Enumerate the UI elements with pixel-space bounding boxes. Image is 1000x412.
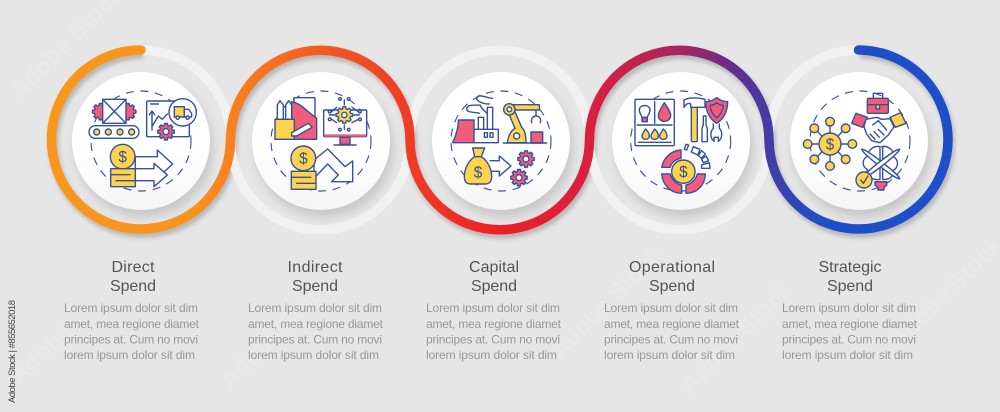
icon: operational spend: $ bbox=[679, 164, 688, 181]
title line 2: Spend bbox=[110, 278, 156, 295]
title: Operational bbox=[629, 259, 715, 276]
body text: lorem ipsum dolor sit dim bbox=[604, 348, 735, 362]
watermark text: Adobe bbox=[5, 317, 77, 389]
watermark text: Adobe Stock bbox=[675, 276, 798, 399]
body text: lorem ipsum dolor sit dim bbox=[64, 348, 195, 362]
ring shadow bbox=[54, 54, 950, 234]
icon: strategic spend: $ bbox=[826, 136, 835, 153]
body text: Lorem ipsum dolor sit dim bbox=[426, 301, 560, 315]
body text: principes at. Cum no movi bbox=[248, 332, 382, 346]
body text: amet, mea regione diamet bbox=[782, 317, 918, 331]
title: Indirect bbox=[288, 259, 343, 276]
white disc bbox=[790, 72, 928, 210]
title line 2: Spend bbox=[471, 278, 517, 295]
body text: principes at. Cum no movi bbox=[782, 332, 916, 346]
white disc bbox=[432, 72, 570, 210]
icon: capital spend: $ bbox=[474, 165, 483, 182]
icon: direct spend bbox=[89, 91, 196, 191]
body text: principes at. Cum no movi bbox=[64, 332, 198, 346]
white disc bbox=[72, 72, 210, 210]
body text: Lorem ipsum dolor sit dim bbox=[64, 301, 198, 315]
body text: amet, mea regione diamet bbox=[248, 317, 384, 331]
body text: amet, mea regione diamet bbox=[604, 317, 740, 331]
panel: direct spend bbox=[64, 72, 210, 362]
icon: direct spend: $ bbox=[118, 149, 127, 166]
white disc bbox=[612, 72, 750, 210]
title line 2: Spend bbox=[292, 278, 338, 295]
icon: capital spend bbox=[451, 91, 551, 191]
title line 2: Spend bbox=[649, 278, 695, 295]
stock id label: Adobe Stock | #855652018 bbox=[7, 300, 18, 403]
title: Capital bbox=[469, 259, 519, 276]
panel: capital spend bbox=[426, 72, 570, 362]
watermark text: Adobe Stock bbox=[215, 271, 338, 394]
gradient wave ribbon bbox=[52, 50, 948, 230]
body text: Lorem ipsum dolor sit dim bbox=[604, 301, 738, 315]
body text: principes at. Cum no movi bbox=[426, 332, 560, 346]
body text bbox=[64, 301, 200, 362]
panel: strategic spend bbox=[782, 72, 928, 362]
title: Strategic bbox=[818, 259, 882, 276]
body text bbox=[782, 301, 918, 362]
icon: operational spend bbox=[631, 91, 731, 193]
body text: amet, mea regione diamet bbox=[64, 317, 200, 331]
body text: lorem ipsum dolor sit dim bbox=[248, 348, 379, 362]
icon: indirect spend: $ bbox=[299, 151, 308, 168]
body text: principes at. Cum no movi bbox=[604, 332, 738, 346]
title: Direct bbox=[112, 259, 155, 276]
panel: indirect spend bbox=[248, 72, 390, 362]
watermark text: Adobe Stock bbox=[545, 241, 668, 364]
body text bbox=[426, 301, 562, 362]
disc shadows bbox=[75, 79, 931, 217]
body text: lorem ipsum dolor sit dim bbox=[782, 348, 913, 362]
panel: operational spend bbox=[604, 72, 750, 362]
icon: strategic spend bbox=[803, 91, 910, 191]
pale ring segments bbox=[141, 50, 858, 230]
body text bbox=[248, 301, 384, 362]
body text: Lorem ipsum dolor sit dim bbox=[248, 301, 382, 315]
body text: amet, mea regione diamet bbox=[426, 317, 562, 331]
body text: Lorem ipsum dolor sit dim bbox=[782, 301, 916, 315]
white disc bbox=[252, 72, 390, 210]
title line 2: Spend bbox=[827, 278, 873, 295]
icon: indirect spend bbox=[271, 91, 371, 191]
body text: lorem ipsum dolor sit dim bbox=[426, 348, 557, 362]
body text bbox=[604, 301, 740, 362]
